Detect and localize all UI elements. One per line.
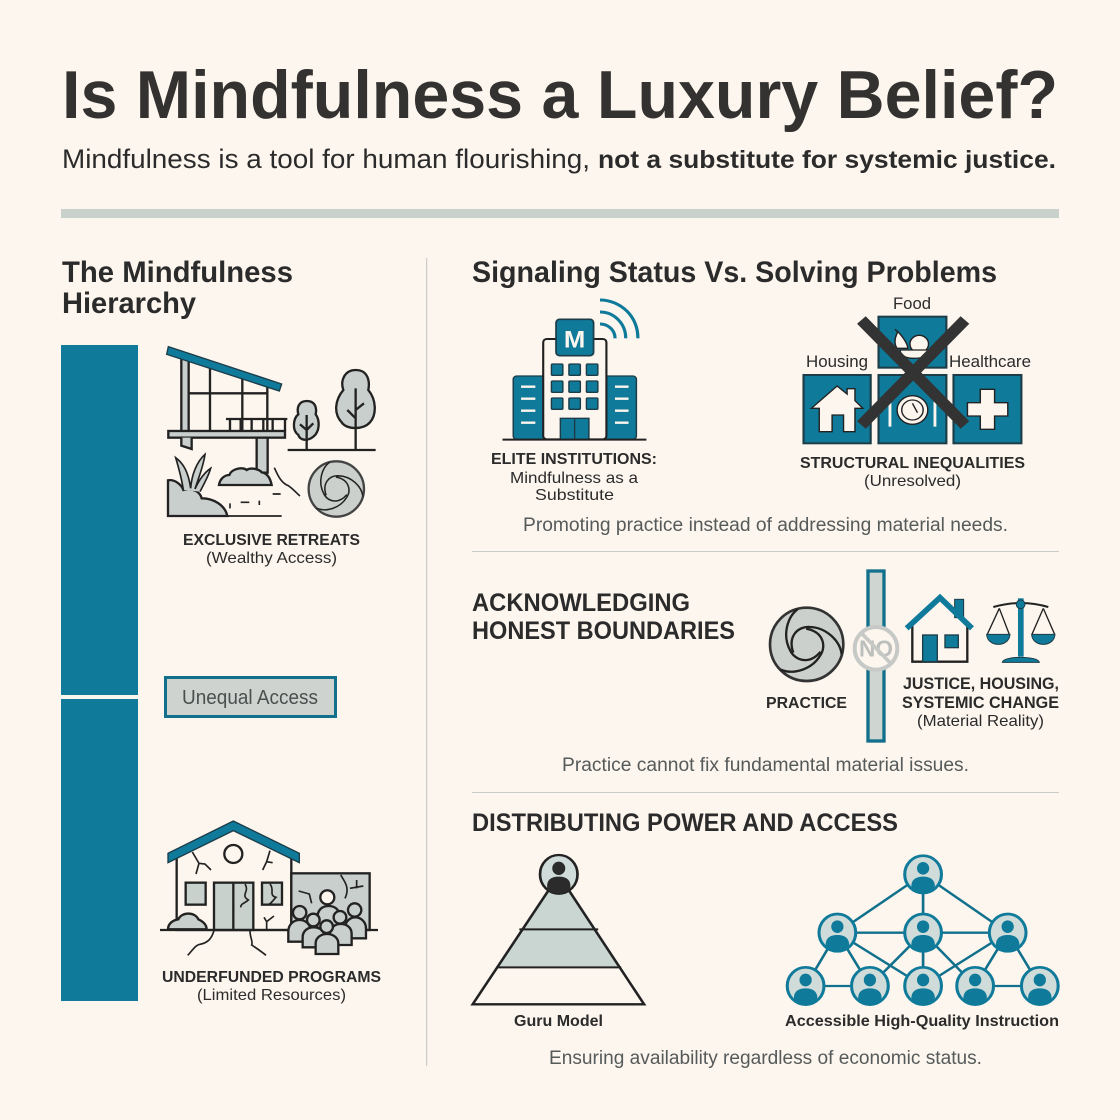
label: justice, housing, systemic change: SYSTEMIC CHANGE — [902, 693, 1059, 712]
label: justice, housing, systemic change: (Material Reality) — [917, 713, 1044, 730]
icon: barrier with no sign: NO — [859, 636, 893, 662]
label: justice, housing, systemic change — [902, 674, 1059, 730]
caption: practice cannot fix: Practice cannot fix fundamental material issues. — [562, 755, 969, 776]
callout: unequal access — [166, 678, 336, 716]
callout: unequal access: Unequal Access — [182, 687, 318, 709]
panel: distributing power and access — [472, 809, 1059, 1069]
chart: distributed network — [787, 856, 1058, 1005]
panel: signaling status vs solving problems — [472, 256, 1031, 536]
panel: the mindfulness hierarchy — [61, 256, 381, 1004]
label: elite institutions: Mindfulness as a — [510, 470, 638, 487]
icon: barrier with no sign — [855, 571, 897, 741]
icon: elite institution building: M — [564, 326, 585, 353]
label: underfunded programs: (Limited Resources) — [197, 987, 346, 1004]
icon: crossed out housing, food, healthcare — [804, 317, 1021, 443]
label: accessible instruction: Accessible High-Quality Instruction — [785, 1013, 1059, 1030]
label: structural inequalities: STRUCTURAL INEQUALITIES — [800, 455, 1025, 472]
icon: guru pyramid — [473, 855, 644, 1004]
label: elite institutions: ELITE INSTITUTIONS: — [491, 451, 657, 468]
panel: acknowledging honest boundaries — [472, 571, 1059, 776]
label: guru model: Guru Model — [514, 1013, 603, 1030]
label: exclusive retreats: EXCLUSIVE RETREATS — [183, 532, 360, 549]
subtitle: Mindfulness is a tool for human flourishing, — [62, 144, 590, 174]
heading: honest boundaries — [472, 589, 735, 645]
label: healthcare: Healthcare — [949, 352, 1031, 371]
heading: signaling status: Signaling Status Vs. Solving Problems — [472, 256, 997, 289]
label: underfunded programs — [162, 969, 381, 1004]
hierarchy bar — [61, 345, 138, 1001]
heading: the mindfulness hierarchy: The Mindfulness — [62, 256, 293, 289]
heading: the mindfulness hierarchy — [62, 256, 293, 320]
label: structural inequalities — [800, 455, 1025, 490]
label: elite institutions: Substitute — [535, 487, 614, 504]
caption: ensuring availability: Ensuring availability regardless of economic status. — [549, 1048, 982, 1069]
title: Is Mindfulness a Luxury Belief? — [62, 57, 1058, 133]
label: food: Food — [893, 294, 931, 313]
label: structural inequalities: (Unresolved) — [864, 473, 961, 490]
icon: underfunded school and crowd — [160, 821, 378, 955]
icon: practice spiral — [770, 608, 843, 683]
icon: house — [907, 598, 972, 662]
heading: distributing power: DISTRIBUTING POWER AND ACCESS — [472, 809, 898, 837]
icon: exclusive retreat house and landscape — [167, 347, 376, 519]
label: exclusive retreats: (Wealthy Access) — [206, 550, 337, 567]
caption: promoting practice: Promoting practice instead of addressing material needs. — [523, 515, 1008, 536]
label: underfunded programs: UNDERFUNDED PROGRAMS — [162, 969, 381, 986]
label: practice: PRACTICE — [766, 695, 847, 712]
label: justice, housing, systemic change: JUSTICE, HOUSING, — [903, 674, 1059, 693]
subtitle: not a substitute for systemic justice. — [598, 146, 1056, 174]
heading: honest boundaries: HONEST BOUNDARIES — [472, 617, 735, 645]
heading: the mindfulness hierarchy: Hierarchy — [62, 287, 196, 320]
subtitle — [62, 144, 1056, 174]
icon: scales of justice — [987, 598, 1055, 662]
label: elite institutions — [491, 451, 657, 504]
icon: elite institution building — [502, 300, 646, 440]
heading: honest boundaries: ACKNOWLEDGING — [472, 589, 690, 617]
label: housing: Housing — [806, 352, 868, 371]
label: exclusive retreats — [183, 532, 360, 567]
